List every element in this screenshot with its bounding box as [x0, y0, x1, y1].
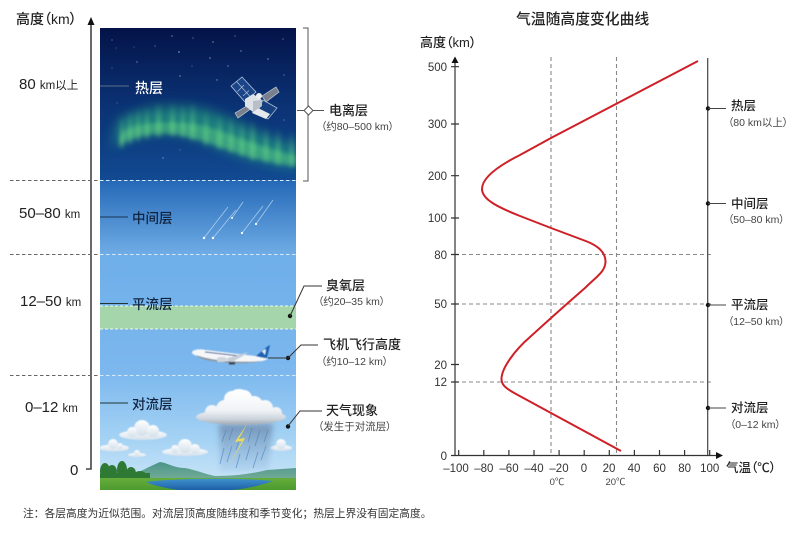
callout: ozone: （约20–35 km） — [318, 295, 385, 308]
chart layer marker: troposphere: 对流层 — [731, 401, 769, 415]
layer label: mesosphere — [100, 211, 172, 224]
callout: weather: （发生于对流层） — [318, 420, 392, 433]
x axis title: 气温（℃） — [726, 460, 776, 475]
y tick labels: 0 — [441, 451, 447, 463]
axis title: 高度（km） — [16, 11, 77, 27]
chart title: 气温随高度变化曲线 — [516, 10, 649, 28]
callout: weather: 天气现象 — [326, 403, 378, 418]
x tick labels: 80 — [678, 463, 691, 475]
boundary dashes — [10, 180, 296, 376]
chart y-axis title: 高度（km） — [420, 35, 476, 50]
panel: atmosphere layers — [99, 28, 296, 490]
callout: flight altitude: （约10–12 km） — [321, 355, 388, 368]
chart layer marker: stratosphere — [706, 298, 785, 328]
aurora — [112, 102, 296, 168]
y tick labels: 20 — [434, 360, 447, 372]
layer label: thermosphere: 热层 — [135, 80, 163, 96]
x tick labels: –100 — [443, 463, 469, 475]
y tick labels: 100 — [428, 213, 447, 225]
chart layer marker: thermosphere — [706, 98, 788, 129]
chart layer marker: mesosphere — [706, 196, 785, 226]
meteors — [203, 200, 273, 239]
chart axes — [451, 58, 717, 456]
layer label: stratosphere: 平流层 — [132, 297, 172, 312]
footnote: 注：各层高度为近似范围。对流层顶高度随纬度和季节变化；热层上界没有固定高度。 — [23, 507, 432, 520]
layer label: mesosphere: 中间层 — [132, 211, 172, 226]
chart layer marker: thermosphere: （80 km以上） — [728, 117, 788, 129]
altitude range labels: 0–12 km — [25, 399, 78, 416]
airplane — [192, 345, 270, 364]
callout: ionosphere bracket: （约80–500 km） — [321, 120, 394, 133]
temperature curve — [482, 61, 698, 451]
chart gridlines — [455, 57, 712, 455]
layer label: troposphere: 对流层 — [132, 397, 172, 412]
x tick labels: –40 — [524, 463, 544, 475]
y tick labels: 200 — [428, 171, 447, 183]
callout: ozone: 臭氧层 — [326, 278, 365, 293]
altitude axis — [86, 17, 94, 469]
callout: flight altitude: 飞机飞行高度 — [323, 337, 401, 352]
callout: flight altitude — [268, 337, 401, 368]
y tick labels: 50 — [434, 299, 447, 311]
altitude range labels: 0 — [70, 462, 78, 479]
stars — [111, 35, 285, 159]
callout: ozone — [288, 278, 385, 318]
x tick labels: 20 — [603, 463, 615, 475]
chart layer marker: thermosphere: 热层 — [731, 98, 756, 113]
y tick labels: 12 — [434, 377, 447, 389]
altitude range labels: 50–80 km — [19, 205, 80, 222]
y tick labels: 500 — [428, 62, 447, 74]
callout: ionosphere bracket — [297, 28, 394, 181]
layer label: thermosphere — [100, 80, 162, 94]
callout: ionosphere bracket: 电离层 — [329, 103, 368, 118]
ozone band — [100, 306, 296, 329]
chart: temperature vs altitude — [420, 35, 776, 488]
x tick labels: –80 — [474, 463, 493, 475]
cloud: storm cloud — [196, 389, 286, 425]
x tick labels: –60 — [499, 463, 519, 475]
x tick labels: –20 — [549, 463, 569, 475]
rain and lightning — [219, 424, 273, 472]
x tick labels: 0℃ — [550, 477, 565, 488]
layer label: stratosphere — [100, 297, 172, 310]
altitude range labels: 80 km以上 — [19, 76, 78, 93]
x tick labels: 100 — [700, 463, 719, 475]
x tick labels: 0 — [581, 463, 587, 475]
y tick labels — [428, 62, 447, 463]
altitude range labels: 12–50 km — [20, 293, 81, 310]
y tick labels: 80 — [434, 250, 447, 262]
chart layer marker: troposphere: （0–12 km） — [730, 419, 781, 431]
altitude range labels — [19, 76, 81, 479]
x tick labels: 20℃ — [605, 477, 626, 488]
callout: weather — [286, 403, 392, 433]
cloud: small clouds — [99, 420, 292, 457]
chart layer marker: stratosphere: （12–50 km） — [728, 316, 785, 328]
chart layer marker: mesosphere: （50–80 km） — [728, 214, 785, 226]
icon: satellite — [231, 77, 279, 119]
chart layer marker: mesosphere: 中间层 — [731, 196, 769, 211]
layer label: troposphere — [100, 397, 172, 410]
x tick labels: 60 — [653, 463, 666, 475]
y tick labels: 300 — [428, 119, 447, 131]
chart layer marker: troposphere — [706, 401, 781, 431]
x tick labels: 40 — [628, 463, 640, 475]
landscape — [100, 461, 296, 490]
x tick labels — [443, 463, 719, 488]
chart layer marker: stratosphere: 平流层 — [731, 298, 769, 312]
